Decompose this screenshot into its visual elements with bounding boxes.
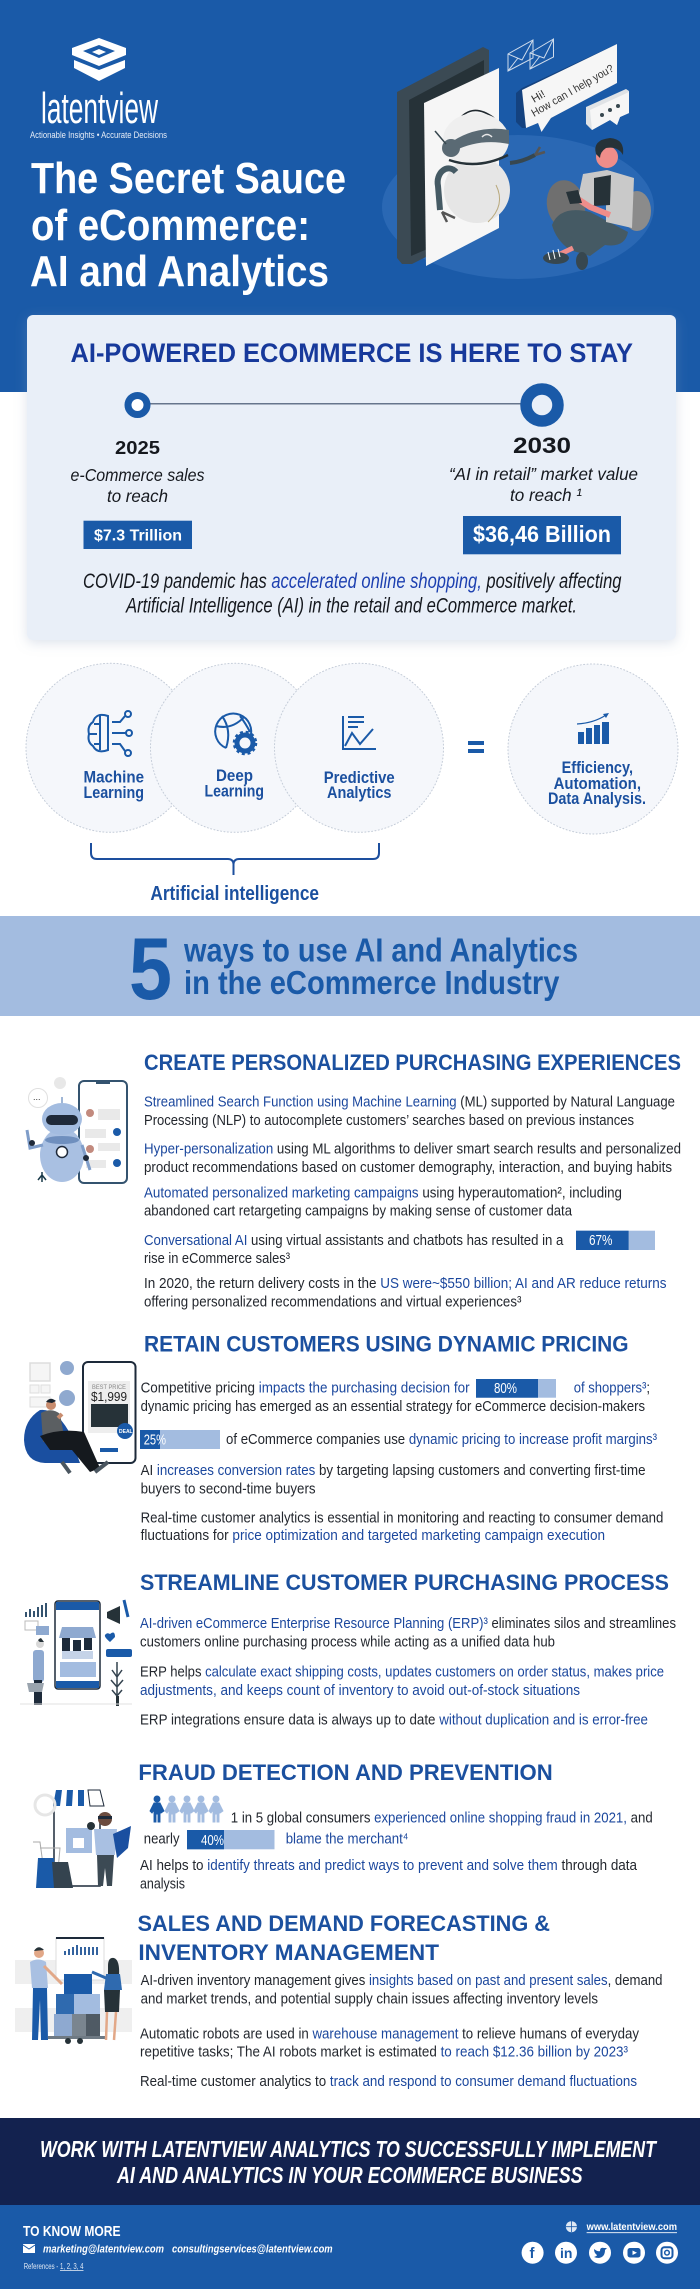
stat: 2030 — [449, 433, 638, 554]
circle: predictive analytics — [274, 663, 444, 832]
text block: dynamic pricing points: buyers to second-time buyers — [141, 1480, 316, 1497]
logo: LatentView: latentview — [41, 84, 158, 133]
logo: LatentView — [30, 38, 167, 140]
illustration: man on beanbag with price phone — [24, 1361, 136, 1473]
panel: retain customers using dynamic pricing — [24, 1332, 663, 1544]
COVID-19 statement — [83, 570, 622, 618]
bracket: artificial intelligence — [91, 843, 379, 905]
text block: dynamic pricing points: AI increases conversion rates by targeting lapsing customers and converting first-time — [141, 1462, 646, 1479]
text block: dynamic pricing points: of eCommerce companies use dynamic pricing to increase profit margins³ — [226, 1431, 657, 1448]
banner: 5 ways: in the eCommerce Industry — [184, 964, 560, 1001]
text block: forecasting points: and market trends, and potential supply chain issues affecting inventory levels — [141, 1990, 598, 2007]
bracket: artificial intelligence: Artificial intelligence — [150, 883, 319, 905]
stat: 2025: 2025 — [115, 438, 160, 458]
COVID-19 statement: COVID-19 pandemic has accelerated online shopping, positively affecting — [83, 570, 622, 593]
text block: personalization points: offering personalized recommendations and virtual experiences³ — [144, 1294, 521, 1311]
text block: fraud points: blame the merchant⁴ — [286, 1830, 408, 1847]
stat: 2030: to reach ¹ — [510, 485, 582, 505]
contact details: marketing@latentview.com — [43, 2244, 164, 2256]
circle: efficiency, automation, data analysis — [508, 664, 678, 834]
stat: 2025: $7.3 Trillion — [94, 528, 182, 545]
stat: 2030: $36,46 Billion — [473, 521, 611, 547]
title — [30, 154, 346, 296]
contact details: consultingservices@latentview.com — [172, 2244, 333, 2256]
circle: efficiency, automation, data analysis: Efficiency, — [562, 758, 633, 777]
illustration: man on beanbag with price phone: BEST PRICE — [92, 1384, 127, 1391]
text block: ERP points: adjustments, and keeps count of inventory to avoid out-of-stock situations — [140, 1682, 580, 1699]
text block: dynamic pricing points: fluctuations for price optimization and targeted marketing campaign execution — [141, 1527, 605, 1544]
illustration: warehouse team with boxes — [15, 1937, 132, 2044]
website link: www.latentview.com — [586, 2221, 677, 2233]
contact details — [23, 2223, 333, 2271]
icon: 1 in 5 people — [150, 1796, 223, 1822]
circle: predictive analytics: Predictive — [324, 768, 395, 787]
text block: ERP points: AI-driven eCommerce Enterprise Resource Planning (ERP)³ eliminates silos and streamlines — [140, 1615, 676, 1632]
text block: forecasting points: Automatic robots are used in warehouse management to relieve humans of everyday — [140, 2025, 639, 2042]
circle: predictive analytics: Analytics — [327, 783, 392, 802]
hero illustration: robot chatbot in phone and seated man: How can I help you? — [530, 63, 616, 120]
heading: RETAIN CUSTOMERS USING DYNAMIC PRICING — [144, 1332, 629, 1357]
banner: 5 ways: 5 — [129, 919, 172, 1018]
progress bar: 25% — [140, 1430, 220, 1449]
progress bar: 80%: 80% — [494, 1381, 517, 1397]
COVID-19 statement: Artificial Intelligence (AI) in the retail and eCommerce market. — [124, 595, 577, 618]
text block: forecasting points: Real-time customer analytics to track and respond to consumer demand fluctuations — [140, 2073, 637, 2090]
social icons — [522, 2242, 678, 2264]
progress bar: 40%: 40% — [201, 1833, 224, 1849]
illustration: man on beanbag with price phone: $1,999 — [91, 1389, 127, 1404]
progress bar: 67%: 67% — [589, 1233, 613, 1249]
text block: fraud points: analysis — [140, 1875, 185, 1892]
text block: ERP points: customers online purchasing process while acting as a unified data hub — [140, 1634, 555, 1651]
call to action band: AI AND ANALYTICS IN YOUR ECOMMERCE BUSINESS — [116, 2162, 583, 2188]
hero illustration: robot chatbot in phone and seated man: Hi! — [530, 88, 548, 106]
timeline from 2025 to 2030 — [128, 389, 558, 421]
text block: ERP points: ERP integrations ensure data is always up to date without duplication and is error-free — [140, 1711, 648, 1728]
panel: create personalized purchasing experiences — [27, 1050, 681, 1311]
text block: personalization points — [144, 1094, 681, 1311]
stat: 2025: e-Commerce sales — [70, 465, 205, 485]
hero illustration: robot chatbot in phone and seated man — [382, 39, 654, 279]
text block: forecasting points — [140, 1972, 662, 2090]
text block: personalization points: rise in eCommerce sales³ — [144, 1250, 290, 1267]
illustration: robot and chat phone: ... — [33, 1092, 41, 1102]
social icons: in — [560, 2245, 572, 2261]
contact details: TO KNOW MORE — [23, 2223, 120, 2240]
text block: personalization points: Automated personalized marketing campaigns using hyperautomation², including — [144, 1184, 622, 1201]
heading: STREAMLINE CUSTOMER PURCHASING PROCESS — [140, 1570, 669, 1595]
progress bar: 40% — [187, 1830, 274, 1849]
heading — [138, 1911, 550, 1965]
text block: personalization points: Processing (NLP) to autocomplete customers’ searches based on previous instances — [144, 1112, 634, 1129]
text block: personalization points: Streamlined Search Function using Machine Learning (ML) supported by Natural Language — [144, 1094, 675, 1111]
banner: 5 ways: ways to use AI and Analytics — [183, 932, 578, 969]
text block: fraud points: AI helps to identify threats and predict ways to prevent and solve them through data — [140, 1857, 638, 1874]
logo: LatentView: Actionable Insights • Accurate Decisions — [30, 130, 167, 140]
text block: personalization points: In 2020, the return delivery costs in the US were~$550 billion; AI and AR reduce returns — [144, 1275, 666, 1292]
title: AI and Analytics — [30, 247, 329, 296]
stat: 2025 — [70, 438, 205, 549]
panel: AI-powered ecommerce stats — [27, 315, 676, 640]
circle: machine learning: Machine — [84, 768, 144, 787]
text block: dynamic pricing points — [141, 1380, 663, 1544]
panel: fraud detection and prevention — [33, 1760, 653, 1892]
circle: machine learning: Learning — [84, 783, 144, 802]
text block: fraud points — [140, 1809, 653, 1892]
circle: deep learning: Learning — [204, 782, 264, 801]
banner: 5 ways — [0, 916, 700, 1018]
progress bar: 25%: 25% — [144, 1432, 166, 1448]
title: The Secret Sauce — [31, 154, 346, 203]
progress bar: 80% — [476, 1379, 556, 1398]
text block: dynamic pricing points: of shoppers³; — [574, 1380, 650, 1397]
heading: FRAUD DETECTION AND PREVENTION — [138, 1760, 553, 1785]
panel: sales and demand forecasting — [15, 1911, 662, 2090]
heading: SALES AND DEMAND FORECASTING & — [138, 1911, 550, 1936]
social icons: f — [530, 2245, 536, 2262]
call to action band — [0, 2118, 700, 2205]
stat: 2025: to reach — [107, 486, 168, 506]
stat: 2030: “AI in retail” market value — [449, 464, 638, 484]
illustration: robot and chat phone — [27, 1077, 127, 1183]
heading: INVENTORY MANAGEMENT — [138, 1940, 440, 1965]
circle: efficiency, automation, data analysis: Automation, — [554, 774, 641, 793]
progress bar: 67% — [576, 1231, 655, 1250]
text block: fraud points: nearly — [144, 1830, 180, 1847]
illustration: man on beanbag with price phone: DEAL — [119, 1429, 133, 1435]
circle: deep learning — [150, 663, 320, 832]
equals sign — [468, 741, 484, 753]
illustration: store guard with shield — [33, 1790, 131, 1888]
text block: personalization points: Conversational AI using virtual assistants and chatbots has resulted in a — [144, 1232, 564, 1249]
text block: ERP points — [140, 1615, 676, 1728]
text block: forecasting points: repetitive tasks; The AI robots market is estimated to reach $12.36 billion by 2023³ — [140, 2044, 628, 2061]
text block: fraud points: 1 in 5 global consumers experienced online shopping fraud in 2021, and — [231, 1809, 653, 1826]
title: of eCommerce: — [31, 201, 310, 250]
footer — [0, 2205, 700, 2289]
contact details: References - 1, 2, 3, 4 — [24, 2262, 84, 2271]
text block: personalization points: abandoned cart retargeting campaigns by making sense of customer data — [144, 1203, 573, 1220]
circle: deep learning: Deep — [216, 766, 253, 785]
card heading: AI-POWERED ECOMMERCE IS HERE TO STAY — [70, 338, 633, 368]
illustration: shopper and store phone — [20, 1600, 132, 1706]
stat: 2030: 2030 — [513, 433, 571, 458]
panel: streamline customer purchasing process — [20, 1570, 676, 1728]
diagram: AI components equation — [26, 663, 678, 905]
header band — [0, 0, 700, 392]
circle: efficiency, automation, data analysis: Data Analysis. — [548, 789, 646, 808]
text block: dynamic pricing points: Competitive pricing impacts the purchasing decision for — [141, 1380, 470, 1397]
text block: forecasting points: AI-driven inventory management gives insights based on past and present sales, demand — [141, 1972, 663, 1989]
circle: machine learning — [26, 663, 195, 832]
